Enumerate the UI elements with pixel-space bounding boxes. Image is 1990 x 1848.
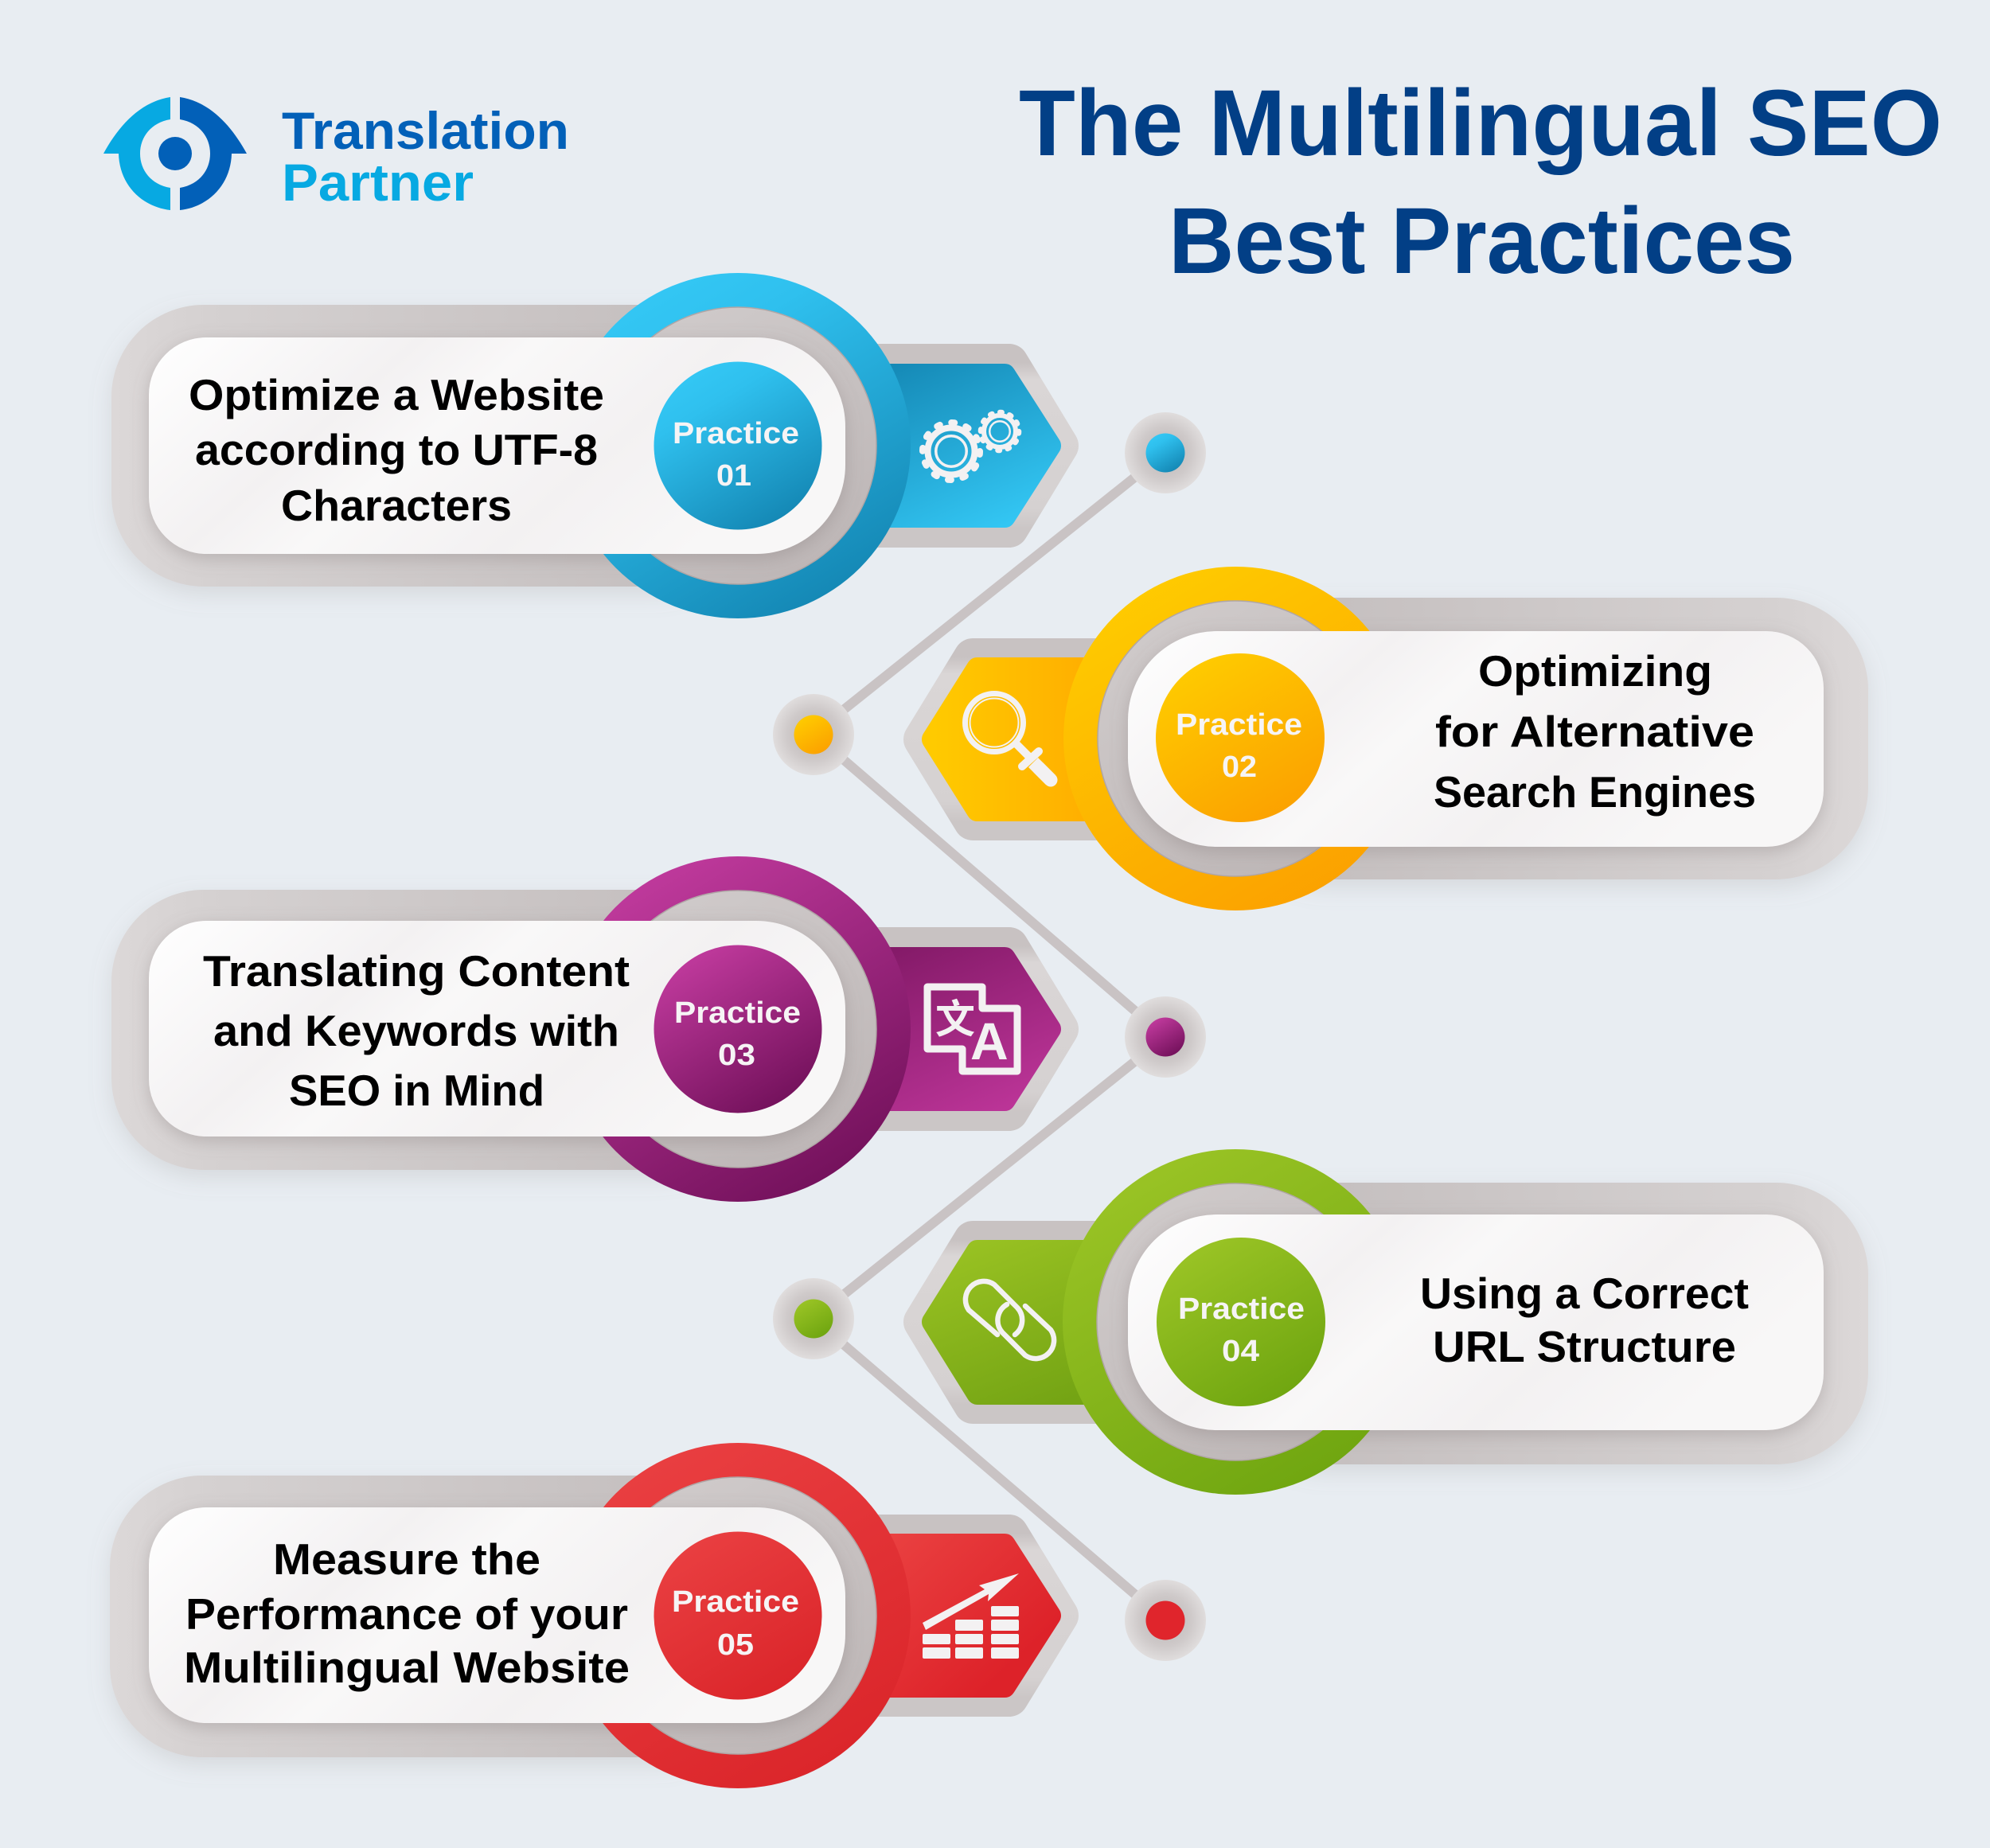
arrow tag base	[923, 1240, 1154, 1405]
icon: translate	[927, 987, 1017, 1071]
badge number: 04	[1222, 1335, 1259, 1368]
card text: according to UTF-8	[195, 425, 598, 474]
node 3	[1125, 996, 1206, 1078]
card text	[1434, 646, 1756, 817]
badge label: Practice	[673, 417, 799, 450]
node 2	[773, 694, 854, 775]
outer grey pill	[1234, 1183, 1868, 1464]
white pill	[149, 337, 845, 554]
outer grey pill	[111, 305, 748, 587]
card text: Optimizing	[1478, 646, 1712, 696]
practice badge	[1157, 1238, 1325, 1406]
card text: URL Structure	[1433, 1322, 1736, 1371]
icon: gears	[923, 412, 1019, 480]
colour ring	[565, 273, 911, 618]
card text	[189, 370, 604, 530]
arrow tag base	[796, 946, 1059, 1112]
panel: practice 05	[110, 1443, 1059, 1788]
badge number: 02	[1222, 751, 1257, 784]
node 1	[1125, 412, 1206, 493]
colour ring	[565, 1443, 911, 1788]
inner grey circle	[1097, 1183, 1374, 1460]
colour ring	[565, 856, 911, 1202]
badge label: Practice	[672, 1585, 799, 1619]
inner grey circle	[599, 891, 876, 1168]
arrow tag base	[923, 657, 1154, 821]
arrow tag colour	[796, 375, 1050, 517]
practice badge	[654, 361, 821, 530]
badge number: 01	[716, 459, 751, 493]
title line 1: The Multilingual SEO	[1019, 71, 1942, 176]
arrow tag base	[796, 363, 1059, 528]
colour ring	[1063, 1149, 1408, 1495]
inner grey circle	[599, 307, 876, 584]
panel: practice 03	[111, 856, 1059, 1202]
arrow tag colour	[933, 1251, 1154, 1394]
practice badge	[654, 1531, 821, 1700]
card text: Optimize a Website	[189, 370, 604, 419]
arrow tag base	[796, 1534, 1059, 1698]
badge number: 05	[717, 1628, 754, 1662]
card text: SEO in Mind	[289, 1066, 544, 1115]
card text	[203, 946, 630, 1115]
title line 2: Best Practices	[1169, 189, 1795, 294]
card text: for Alternative	[1435, 707, 1754, 756]
card text	[1420, 1269, 1749, 1371]
panel: practice 04	[923, 1149, 1868, 1495]
card text	[184, 1534, 630, 1692]
card text: Multilingual Website	[184, 1643, 630, 1692]
card text: Search Engines	[1434, 767, 1756, 817]
node 5	[1125, 1580, 1206, 1661]
white pill	[149, 1507, 845, 1723]
outer grey pill	[1234, 598, 1868, 879]
card text: Translating Content	[203, 946, 630, 996]
card text: Using a Correct	[1420, 1269, 1749, 1318]
icon: translate: 文	[935, 988, 975, 1045]
arrow tag colour	[933, 669, 1154, 810]
arrow tag colour	[796, 1545, 1050, 1686]
card text: and Keywords with	[213, 1006, 619, 1055]
icon: rising chart	[923, 1573, 1019, 1659]
title	[1019, 71, 1942, 294]
node 4	[773, 1278, 854, 1359]
inner grey circle	[1098, 601, 1373, 876]
logo word: Partner: Partner	[282, 153, 474, 212]
badge label: Practice	[1178, 1292, 1305, 1326]
badge label: Practice	[674, 996, 801, 1030]
practice badge	[1156, 653, 1325, 822]
white pill	[1128, 1214, 1824, 1430]
logo word: Translation: Translation	[282, 101, 569, 160]
icon: chain link	[966, 1281, 1054, 1359]
logo: Translation Partner	[103, 97, 569, 212]
card text: Performance of your	[185, 1589, 628, 1639]
panel: practice 02	[923, 567, 1868, 910]
panel: practice 01	[111, 273, 1059, 618]
arrow tag colour	[796, 958, 1050, 1100]
inner grey circle	[599, 1477, 876, 1754]
icon: magnifier	[965, 694, 1051, 780]
badge label: Practice	[1176, 708, 1302, 742]
outer grey pill	[110, 1476, 748, 1757]
card text: Measure the	[273, 1534, 540, 1584]
card text: Characters	[281, 481, 512, 530]
icon: translate: A	[970, 1012, 1009, 1070]
connector lines	[814, 453, 1165, 1620]
icon: logo arrow mark	[103, 97, 247, 210]
badge number: 03	[718, 1039, 755, 1072]
practice badge	[654, 945, 821, 1113]
white pill	[1128, 631, 1824, 847]
outer grey pill	[111, 890, 748, 1170]
colour ring	[1063, 567, 1407, 910]
white pill	[149, 921, 845, 1136]
